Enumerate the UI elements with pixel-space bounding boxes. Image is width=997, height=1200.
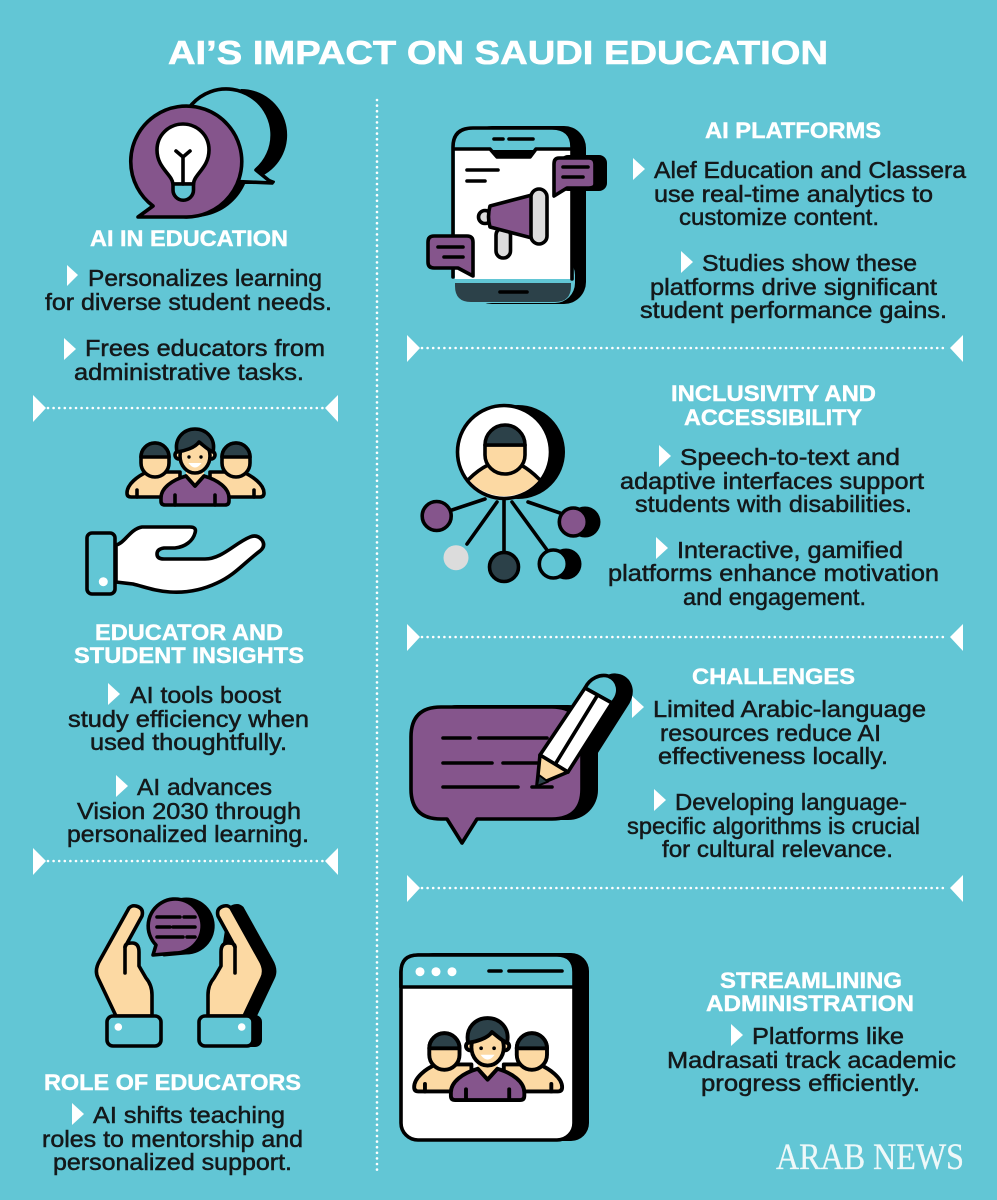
text block: platforms drive significant bbox=[650, 274, 938, 300]
divider arrows bbox=[407, 875, 963, 902]
text block bbox=[42, 1102, 303, 1175]
panel: AI platforms bbox=[428, 118, 966, 323]
divider arrows bbox=[33, 848, 338, 875]
heading: AI PLATFORMS bbox=[705, 118, 881, 143]
divider arrows bbox=[407, 624, 963, 651]
text block: effectiveness locally. bbox=[658, 743, 888, 769]
text block: progress efficiently. bbox=[701, 1070, 920, 1096]
heading: AI IN EDUCATION bbox=[90, 226, 288, 251]
panel: role of educators bbox=[42, 899, 303, 1175]
text block: personalized support. bbox=[53, 1149, 292, 1175]
text block bbox=[633, 157, 966, 323]
text block: use real-time analytics to bbox=[654, 181, 933, 207]
text block bbox=[667, 1023, 956, 1096]
heading: STREAMLINING bbox=[720, 968, 902, 993]
text block bbox=[67, 682, 309, 847]
icon: pencil on speech bubble bbox=[411, 675, 631, 843]
text block: AI advances bbox=[137, 774, 272, 800]
icon: light bulb speech bubbles bbox=[131, 89, 287, 217]
heading: EDUCATOR AND bbox=[95, 620, 283, 645]
text block: Madrasati track academic bbox=[667, 1047, 956, 1073]
heading bbox=[706, 968, 914, 1016]
text block: for cultural relevance. bbox=[662, 836, 893, 862]
text block: Interactive, gamified bbox=[677, 537, 903, 563]
text block: Studies show these bbox=[702, 250, 917, 276]
logo: Arab News: ARAB NEWS bbox=[776, 1137, 964, 1178]
heading: INCLUSIVITY AND bbox=[671, 381, 876, 406]
text block: AI tools boost bbox=[130, 682, 282, 708]
text block: Speech-to-text and bbox=[680, 444, 900, 470]
panel: challenges bbox=[411, 664, 926, 862]
text block: Developing language- bbox=[675, 789, 907, 815]
text block: roles to mentorship and bbox=[42, 1126, 303, 1152]
text block: resources reduce AI bbox=[660, 720, 881, 746]
text block: Platforms like bbox=[752, 1023, 904, 1049]
text block: personalized learning. bbox=[67, 821, 309, 847]
icon: people above open hand bbox=[87, 429, 264, 594]
text block: Frees educators from bbox=[85, 335, 325, 361]
heading: ROLE OF EDUCATORS bbox=[44, 1070, 301, 1095]
icon: browser window with people bbox=[401, 953, 589, 1141]
panel: educator and student insights bbox=[67, 429, 309, 847]
text block: and engagement. bbox=[683, 584, 866, 610]
text block bbox=[45, 265, 332, 385]
text block bbox=[627, 696, 926, 862]
title: AI’S IMPACT ON SAUDI EDUCATION bbox=[168, 34, 828, 71]
text block: adaptive interfaces support bbox=[620, 468, 925, 494]
heading bbox=[671, 381, 876, 430]
text block: specific algorithms is crucial bbox=[627, 813, 920, 839]
panel: streamlining administration bbox=[401, 953, 956, 1141]
panel: AI in education bbox=[45, 89, 332, 385]
panel: inclusivity and accessibility bbox=[422, 381, 939, 610]
divider arrows bbox=[33, 395, 338, 422]
heading: ADMINISTRATION bbox=[706, 991, 914, 1016]
heading: ACCESSIBILITY bbox=[684, 405, 862, 430]
icon: hands around speech bubble bbox=[96, 899, 275, 1047]
text block: Vision 2030 through bbox=[77, 798, 301, 824]
text block: administrative tasks. bbox=[74, 359, 304, 385]
text block: customize content. bbox=[679, 204, 879, 230]
icon: phone with megaphone bbox=[428, 126, 607, 304]
text block: students with disabilities. bbox=[635, 491, 912, 517]
text block: for diverse student needs. bbox=[45, 289, 332, 315]
text block: student performance gains. bbox=[640, 297, 947, 323]
text block: platforms enhance motivation bbox=[608, 560, 939, 586]
text block bbox=[608, 444, 939, 610]
heading: STUDENT INSIGHTS bbox=[74, 643, 304, 668]
text block: study efficiency when bbox=[68, 706, 309, 732]
divider arrows bbox=[407, 335, 963, 362]
heading: CHALLENGES bbox=[692, 664, 855, 689]
text block: AI shifts teaching bbox=[93, 1102, 285, 1128]
heading bbox=[74, 620, 304, 668]
text block: Personalizes learning bbox=[88, 265, 322, 291]
text block: Alef Education and Classera bbox=[654, 157, 966, 183]
icon: person network bbox=[422, 405, 600, 582]
text block: Limited Arabic-language bbox=[653, 696, 926, 722]
text block: used thoughtfully. bbox=[90, 729, 287, 755]
